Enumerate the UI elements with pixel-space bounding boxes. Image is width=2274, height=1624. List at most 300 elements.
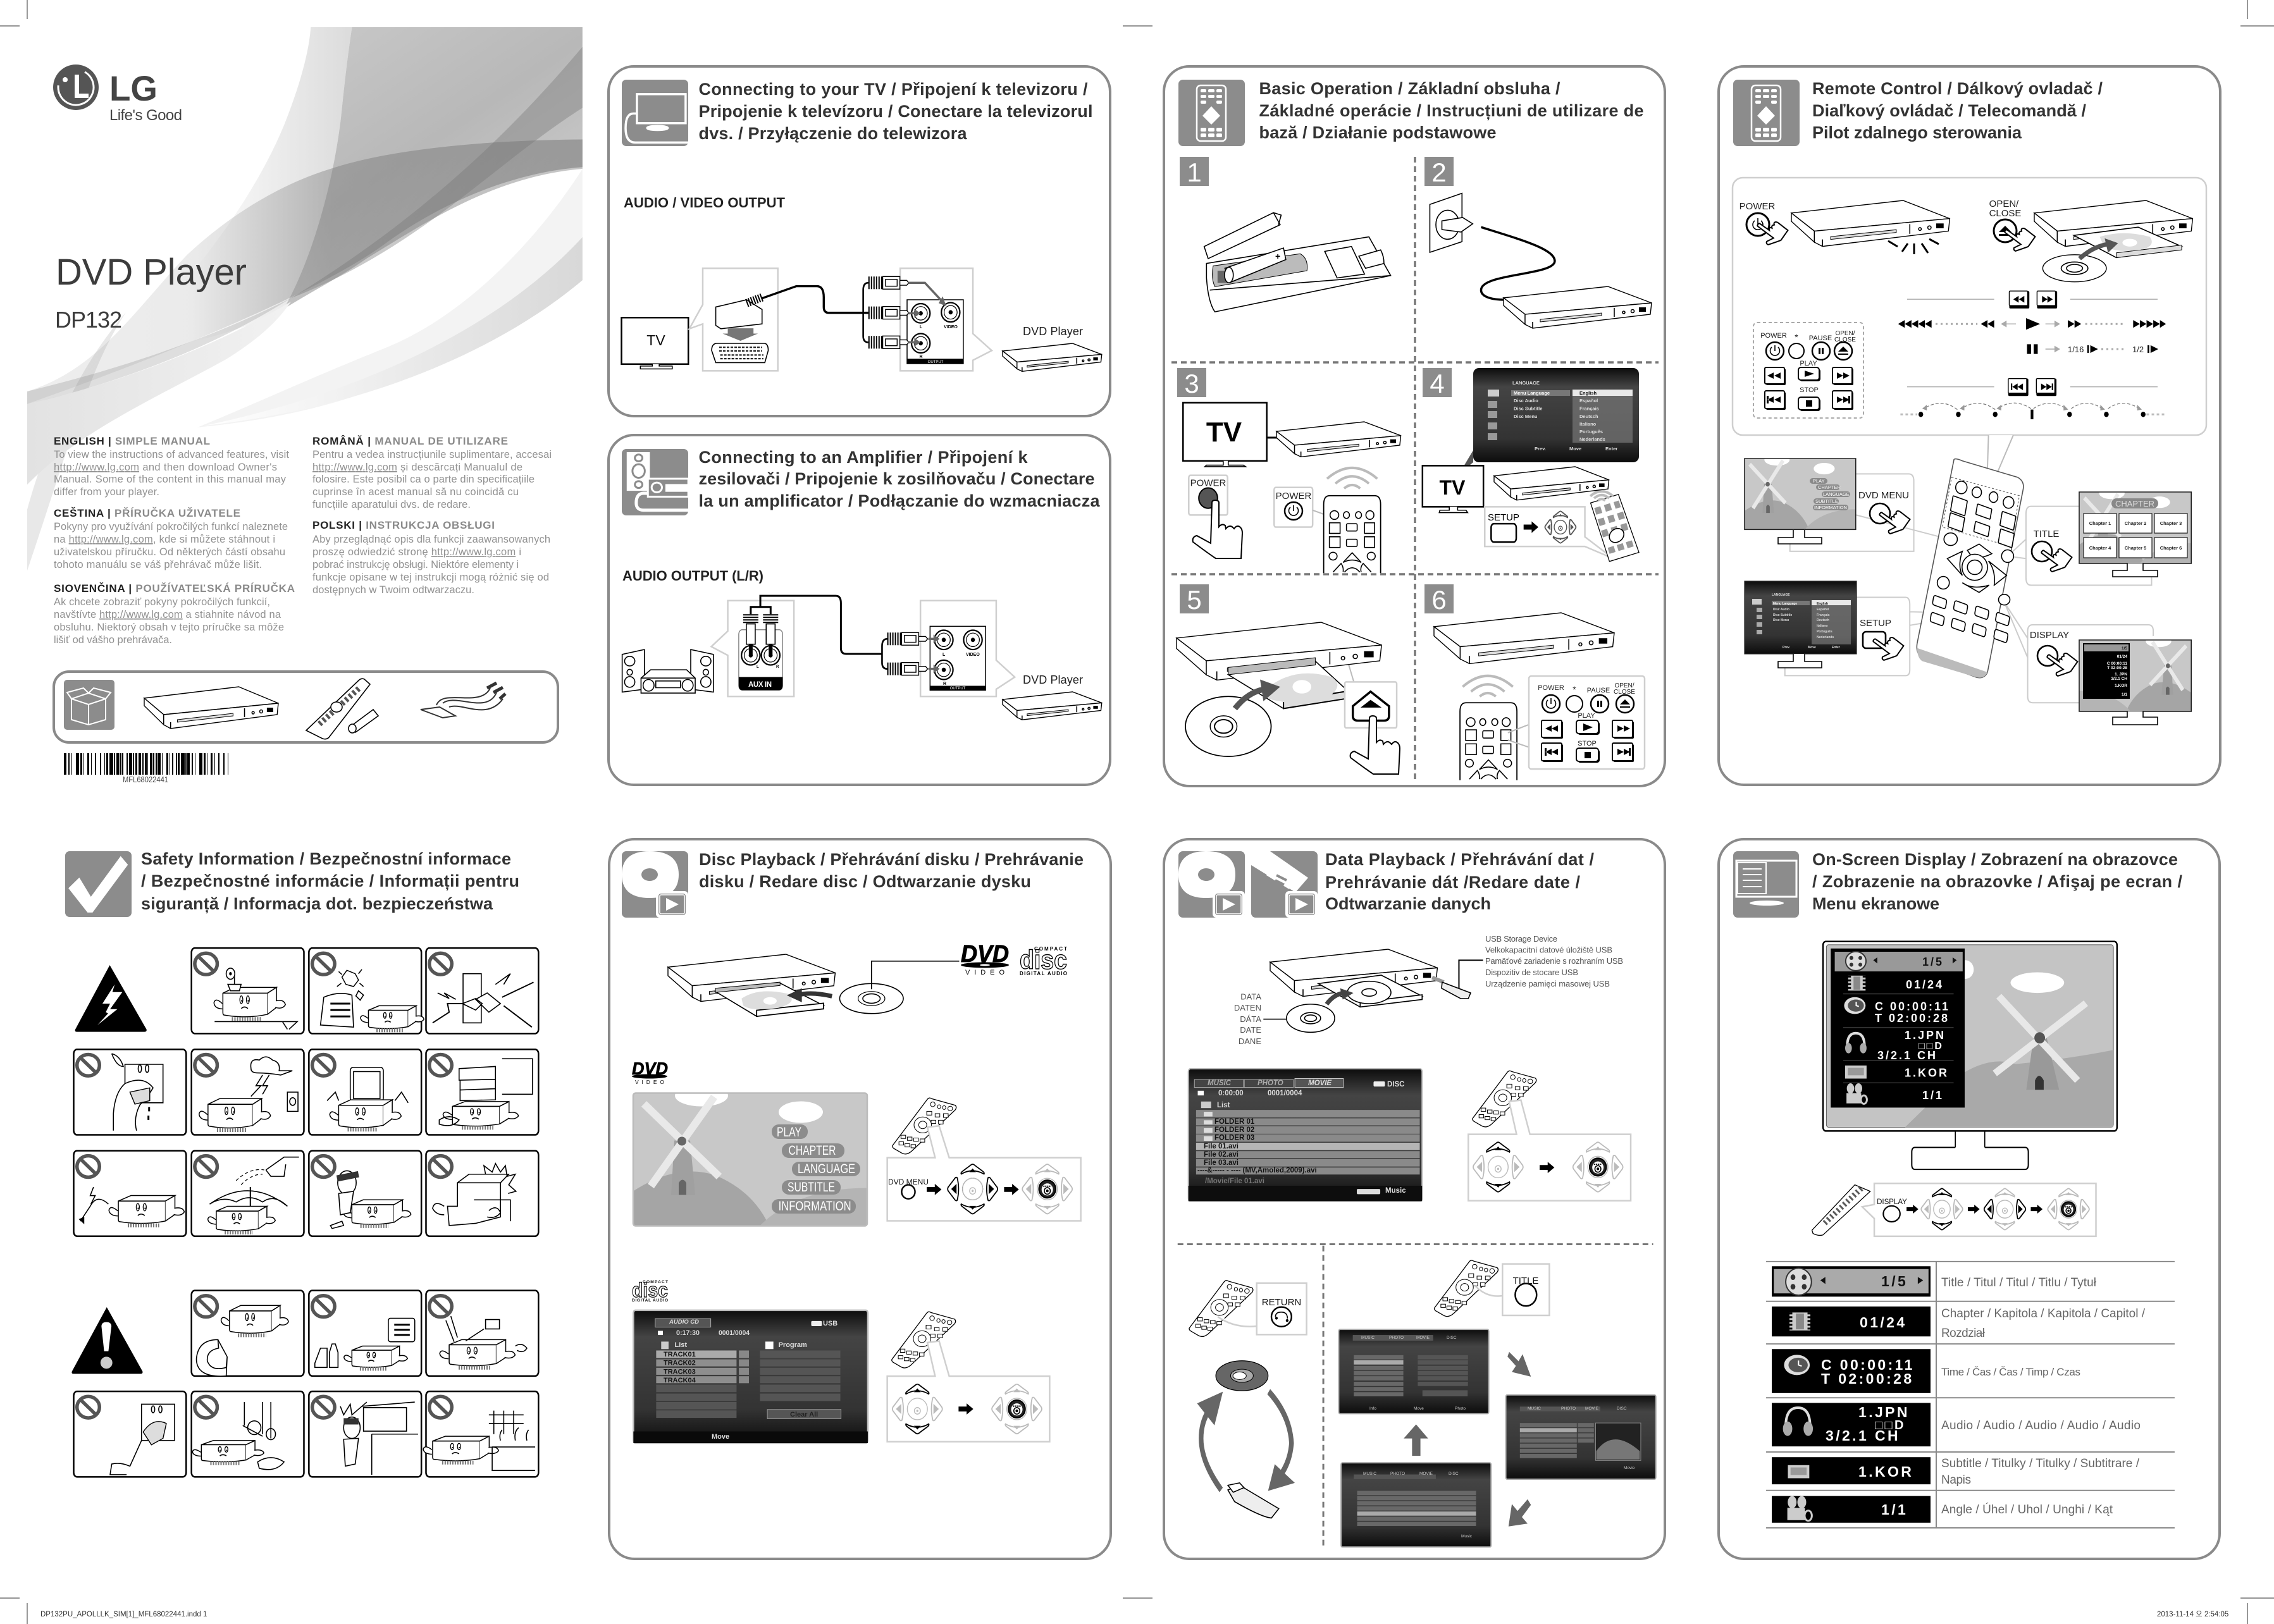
screen: audio cd menu: 0:17:30 — [676, 1329, 700, 1337]
icon: dvd player — [144, 687, 278, 729]
screen: setup menu: Português — [1817, 630, 1832, 634]
cell: electric plug — [426, 948, 538, 1033]
diagram: title switches music photo movie: PHOTO — [1390, 1472, 1405, 1476]
screen: movie file list — [1189, 1069, 1422, 1201]
step 3: power on: 3 — [1184, 369, 1199, 398]
heading: Diaľkový ovládač / Telecomandă / — [1812, 101, 2086, 120]
step 3: power on: POWER — [1190, 478, 1226, 488]
power and open close: OPEN/ — [1989, 199, 2019, 209]
monitor with osd overlay: T 02:00:28 — [1875, 1012, 1950, 1024]
screen: language menu: Deutsch — [1579, 414, 1598, 419]
diagram: title switches music photo movie: PHOTO — [1561, 1406, 1576, 1411]
heading: siguranță / Informacja dot. bezpieczeństwa — [141, 894, 493, 913]
table: osd legend: 1/1 — [1881, 1501, 1908, 1518]
diagram: title switches music photo movie: Move — [1414, 1406, 1424, 1411]
panel: basic operation — [1164, 66, 1665, 786]
screen: chapter menu: Chapter 2 — [2125, 520, 2146, 526]
barcode: MFL68022441 — [123, 775, 168, 784]
table: osd legend: Rozdział — [1941, 1327, 1986, 1340]
cell: heat source — [309, 948, 424, 1033]
table: osd legend: Time / Čas / Čas / Timp / Czas — [1941, 1366, 2080, 1378]
logo: LG Life's Good — [52, 63, 182, 124]
diagram: TV scart to RCA: R — [919, 355, 923, 359]
cell: falling object — [426, 1291, 538, 1376]
screen: dvd menu: SUBTITLE — [788, 1180, 835, 1195]
remote control illustration with callouts — [1745, 435, 2191, 725]
cell: child — [309, 1151, 421, 1236]
screen: movie file list: MUSIC — [1208, 1080, 1232, 1087]
cell: lightning storm — [192, 1049, 304, 1135]
heading: Pilot zdalnego sterowania — [1812, 123, 2022, 142]
screen: audio cd menu: USB — [823, 1320, 837, 1327]
controls: display sequence: DISPLAY — [1877, 1198, 1907, 1206]
heading — [1259, 79, 1643, 142]
text block: Slovak: SIOVENČINA | POUŽÍVATEĽSKÁ PRÍRUČKA — [54, 582, 295, 594]
transport key rows — [1898, 291, 2166, 419]
diagram: TV scart to RCA: DVD Player — [1023, 325, 1083, 338]
icon: cable — [421, 683, 505, 718]
screen: chapter menu: CHAPTER — [2115, 499, 2154, 508]
icon: open box — [64, 680, 114, 730]
diagram: disc and usb: Urządzenie pamięci masowej USB — [1485, 979, 1610, 988]
table: osd legend: 1/5 — [1881, 1273, 1908, 1289]
heading: zesilovači / Pripojenie k zosilňovaču / Conectare — [698, 469, 1094, 488]
table: osd legend: □□D — [1875, 1418, 1906, 1432]
text block: Romanian: Pentru a vedea instrucțiunile suplimentare, accesai — [312, 449, 552, 460]
diagram: return switches disc and usb: RETURN — [1262, 1297, 1301, 1308]
text block: Czech: CEŠTINA | PŘÍRUČKA UŽIVATELE — [54, 507, 240, 519]
heading — [1325, 850, 1594, 913]
diagram: title switches music photo movie — [1338, 1260, 1656, 1547]
keypad: CLOSE — [1614, 689, 1635, 696]
cell: water and umbrella — [192, 1151, 304, 1236]
logo: compact disc small: disc — [632, 1279, 668, 1301]
text block: Romanian — [312, 435, 552, 510]
icon: monitor menu — [1733, 851, 1799, 918]
diagram: title switches music photo movie: DISC — [1617, 1406, 1627, 1411]
diagram: amplifier to RCA: DVD Player — [1023, 674, 1083, 686]
screen: language menu: Français — [1579, 406, 1599, 411]
keypad: * — [1573, 684, 1576, 694]
screen: movie file list: DISC — [1387, 1081, 1404, 1088]
screen: audio cd menu: Clear All — [790, 1411, 818, 1418]
diagram: disc and usb: DÁTA — [1240, 1014, 1261, 1024]
icon: speaker connection — [622, 449, 688, 515]
cell: broken unit — [426, 1151, 538, 1236]
screen C — [1341, 1463, 1491, 1547]
text block: Polish — [312, 519, 550, 596]
heading — [698, 448, 1100, 510]
heading — [699, 850, 1084, 891]
table: osd legend: Title / Titul / Titul / Titlu / Tytuł — [1941, 1276, 2097, 1289]
button labels: SETUP — [1860, 618, 1891, 629]
screen: chapter menu: Chapter 1 — [2089, 520, 2111, 526]
panel: safety information — [65, 849, 538, 1477]
heading: dvs. / Przyłączenie do telewizora — [698, 124, 967, 143]
monitor with osd overlay: 01/24 — [1906, 978, 1944, 991]
step 3: power on: POWER — [1276, 491, 1311, 501]
text block: Polish: pobrać instrukcję obsługi. Niektóre elementy i — [312, 559, 519, 570]
step 4: setup menu — [1423, 368, 1639, 565]
text block: Slovak: navštívte http://www.lg.com a stiahnite návod na — [54, 609, 281, 620]
keypad: STOP — [1800, 386, 1819, 394]
diagram: amplifier to RCA: L — [757, 665, 759, 669]
icon: check mark — [65, 851, 132, 917]
screen: setup menu: Enter — [1832, 646, 1840, 649]
screen: display info: 1.KOR — [2115, 684, 2127, 688]
diagram: title switches music photo movie: MUSIC — [1363, 1472, 1376, 1476]
screen: dvd menu: INFORMATION — [1814, 505, 1847, 510]
screen: movie file list: List — [1217, 1102, 1230, 1109]
step 6: remote buttons — [1424, 584, 1645, 780]
screen A — [1338, 1329, 1489, 1413]
icon: remote and battery — [306, 679, 378, 739]
diagram: disc and usb: DANE — [1239, 1037, 1261, 1046]
screen: dvd menu: PLAY — [1813, 478, 1825, 484]
screen: display info: 1. JPN — [2115, 672, 2127, 677]
screen: dvd menu — [1745, 454, 1856, 544]
screen: movie file list: 0:00:00 — [1218, 1090, 1244, 1097]
cover panel: swirl background — [27, 27, 583, 571]
screen: setup menu: Prev. — [1783, 646, 1790, 649]
table: osd legend: C 00:00:11 — [1821, 1356, 1915, 1373]
box: transport functions: 1/16 — [2068, 345, 2084, 354]
screen: language menu: Italiano — [1579, 421, 1597, 427]
screen: display info: 1/1 — [2122, 692, 2127, 697]
button labels: TITLE — [2034, 529, 2059, 539]
screen: setup menu: Español — [1817, 608, 1829, 612]
screen: language menu — [1459, 368, 1639, 474]
panel: data playback — [1164, 839, 1665, 1559]
heading: bază / Działanie podstawowe — [1259, 123, 1497, 142]
screen: setup menu: Italiano — [1817, 624, 1828, 628]
text block: Romanian: http://www.lg.com și descărcați Manualul de — [312, 462, 522, 473]
screen: dvd menu: SUBTITLE — [1815, 498, 1838, 504]
heading: Základné operácie / Instrucțiuni de utilizare de — [1259, 101, 1643, 120]
diagram: title switches music photo movie: Movie — [1624, 1466, 1635, 1470]
table: osd legend: Subtitle / Titulky / Titulky / Subtitrare / — [1941, 1457, 2140, 1470]
cell: cable damage — [73, 1151, 186, 1236]
screen: language menu: Move — [1569, 446, 1581, 452]
controls: display sequence — [1812, 1183, 2096, 1236]
text block: Romanian: ROMÂNĂ | MANUAL DE UTILIZARE — [312, 435, 508, 447]
table: osd legend: Angle / Úhel / Uhol / Unghi / Kąt — [1941, 1503, 2113, 1516]
heading: Prehrávanie dát /Redare date / — [1325, 873, 1580, 892]
table: osd legend — [1766, 1262, 2175, 1528]
text block: English: Manual. Some of the content in this manual may — [54, 474, 287, 485]
screen: movie file list: /Movie/File 01.avi — [1205, 1178, 1264, 1185]
screen: movie file list: FOLDER 03 — [1214, 1135, 1254, 1142]
panel: accessories — [54, 672, 558, 742]
icon: tv connection — [622, 80, 688, 146]
text block: Polish: Aby przeglądnąć opis dla funkcji zaawansowanych — [312, 534, 550, 545]
diagram: title switches music photo movie: DISC — [1447, 1336, 1457, 1340]
screen: setup menu: Français — [1817, 613, 1830, 617]
cell: kitchen steam — [423, 1391, 538, 1477]
table: osd legend: Audio / Audio / Audio / Audio / Audio — [1941, 1419, 2141, 1432]
diagram: disc and usb: DATA — [1240, 992, 1261, 1002]
controls: dvd menu sequence — [887, 1098, 1081, 1221]
screen: language menu: Disc Audio — [1514, 398, 1538, 403]
screen: setup menu: LANGUAGE — [1772, 593, 1790, 597]
screen: setup menu: Nederlands — [1817, 636, 1834, 639]
step 5: load disc — [1177, 584, 1400, 774]
title: DVD Player DP132: DP132 — [55, 307, 122, 333]
logo: compact disc large: disc — [1020, 945, 1067, 975]
screen: dvd menu: LANGUAGE — [798, 1162, 855, 1176]
diagram: disc and usb: Dispozitiv de stocare USB — [1485, 968, 1578, 977]
diagram: amplifier to RCA: VIDEO — [966, 653, 980, 657]
screen: setup menu — [1745, 581, 1857, 668]
screen: language menu: LANGUAGE — [1512, 380, 1540, 386]
diagram: amplifier to RCA: R — [776, 665, 779, 669]
heading: Odtwarzanie danych — [1325, 894, 1491, 913]
screen: language menu: Español — [1579, 398, 1598, 403]
text block: English: http://www.lg.com and then download Owner's — [54, 462, 277, 473]
screen: language menu: Disc Menu — [1514, 414, 1538, 419]
screen: audio cd menu: TRACK03 — [664, 1369, 696, 1376]
screen: setup menu: Disc Menu — [1773, 618, 1789, 622]
screen: movie file list: File 02.avi — [1204, 1151, 1239, 1159]
screen: audio cd menu: Move — [712, 1433, 729, 1441]
logo: compact disc small: DIGITAL AUDIO — [632, 1298, 668, 1303]
text block: Romanian: cuprinse în acest manual să nu coincidă cu — [312, 486, 519, 498]
step 4: setup menu: SETUP — [1488, 512, 1519, 523]
step 1: insert batteries — [1180, 157, 1391, 312]
screen: chapter menu — [2079, 488, 2191, 577]
screen: audio cd menu: TRACK01 — [664, 1351, 696, 1358]
screen: display info — [2079, 636, 2191, 725]
logo: LG Life's Good: Life's Good — [109, 107, 182, 124]
screen: movie file list: MOVIE — [1308, 1080, 1332, 1087]
table: osd legend: 3/2.1 CH — [1826, 1427, 1900, 1444]
screen: audio cd menu: TRACK04 — [664, 1377, 696, 1384]
monitor with osd overlay: 1/5 — [1922, 956, 1944, 968]
screen: chapter menu: Chapter 6 — [2160, 545, 2182, 551]
text block: Czech: uživatelskou příručku. Od některých částí obsahu — [54, 546, 285, 558]
screen: language menu: Enter — [1605, 446, 1617, 452]
subheading: audio video output: AUDIO / VIDEO OUTPUT — [624, 195, 786, 211]
keypad — [1529, 676, 1645, 769]
diagram: title switches music photo movie: MOVIE — [1585, 1406, 1599, 1411]
heading — [1812, 79, 2103, 142]
step dividers — [1171, 157, 1659, 779]
monitor with osd overlay — [1823, 942, 2117, 1169]
screen: display info: T 02:00:28 — [2107, 666, 2127, 670]
cell: stacked boxes near window — [426, 1049, 538, 1135]
panel: remote control — [1719, 66, 2220, 785]
diagram: TV scart to RCA: TV — [646, 332, 665, 348]
controls: track selection — [887, 1312, 1049, 1442]
screen: audio cd menu: List — [674, 1341, 687, 1349]
screen: language menu: Português — [1579, 429, 1603, 434]
cell: dusty place — [192, 1391, 304, 1477]
icon: electric hazard triangle — [75, 965, 147, 1032]
diagram: title switches music photo movie: PHOTO — [1389, 1336, 1404, 1340]
heading: Menu ekranowe — [1812, 894, 1939, 913]
diagram: title switches music photo movie: TITLE — [1513, 1276, 1538, 1286]
heading: Pripojenie k televízoru / Conectare la televizorul — [698, 102, 1093, 121]
cell: flowers on player — [192, 948, 304, 1033]
diagram: amplifier to RCA: OUTPUT — [950, 687, 966, 691]
keypad — [1753, 323, 1863, 418]
heading: Remote Control / Dálkový ovladač / — [1812, 79, 2103, 98]
screen: dvd menu — [633, 1085, 867, 1226]
diagram: TV scart to RCA: L — [920, 325, 923, 329]
text block: Slovak: lišiť od vášho prehrávača. — [54, 634, 172, 646]
panel: disc playback — [609, 839, 1111, 1559]
icon: caution triangle — [71, 1307, 142, 1374]
step 1: insert batteries: + — [1275, 251, 1280, 261]
screen: dvd menu: LANGUAGE — [1823, 491, 1850, 497]
screen: display info: 1/5 — [2122, 646, 2127, 651]
keypad: PLAY — [1578, 712, 1595, 720]
screen: setup menu: Move — [1808, 646, 1816, 649]
heading: / Zobrazenie na obrazovke / Afişaj pe ecran / — [1812, 872, 2182, 891]
cell: child head bump — [309, 1391, 421, 1477]
heading: Data Playback / Přehrávání dat / — [1325, 850, 1594, 869]
diagram: title switches music photo movie: MOVIE — [1419, 1472, 1433, 1476]
keypad: OPEN/ — [1835, 330, 1855, 337]
step 3: power on: TV — [1206, 417, 1242, 448]
screen: language menu: Menu Language — [1514, 390, 1550, 396]
logo: DVD video large: VIDEO — [965, 969, 1004, 976]
table: osd legend: Napis — [1941, 1473, 1971, 1487]
caution cells — [71, 1291, 538, 1477]
monitor with osd overlay: □□D — [1919, 1041, 1944, 1052]
keypad: PAUSE — [1587, 687, 1610, 694]
diagram: TV scart to RCA: OUTPUT — [928, 360, 944, 364]
screen: chapter menu: Chapter 4 — [2089, 545, 2111, 551]
heading: On-Screen Display / Zobrazení na obrazovce — [1812, 850, 2178, 869]
heading: Connecting to your TV / Připojení k televizoru / — [698, 80, 1088, 99]
controls: dvd menu sequence: DVD MENU — [888, 1178, 929, 1186]
diagram: title switches music photo movie: Photo — [1455, 1406, 1466, 1411]
screen: display info: 3/2.1 CH — [2111, 677, 2127, 681]
diagram: title switches music photo movie: Info — [1369, 1406, 1376, 1411]
text block: Czech — [54, 507, 288, 570]
heading: disku / Redare disc / Odtwarzanie dysku — [699, 872, 1031, 891]
diagram: title switches music photo movie: MUSIC — [1361, 1336, 1375, 1340]
table: osd legend: 1.KOR — [1858, 1463, 1913, 1480]
screen: chapter menu: Chapter 3 — [2160, 520, 2182, 526]
heading: / Bezpečnostné informácie / Informații pentru — [141, 871, 519, 890]
icon: usb play — [1251, 851, 1318, 918]
diagram: disc and usb: Pamäťové zariadenie s rozhraním USB — [1485, 956, 1623, 966]
screen: language menu: Prev. — [1535, 446, 1546, 452]
crop marks and print slug: 2013-11-14 오 2:54:05 — [2157, 1611, 2228, 1618]
screen: audio cd menu: 0001/0004 — [719, 1329, 750, 1337]
screen: movie file list: File 03.avi — [1204, 1159, 1239, 1167]
step 4: setup menu: TV — [1440, 476, 1466, 499]
diagram: return switches disc and usb — [1189, 1281, 1307, 1518]
keypad: * — [1795, 332, 1798, 342]
keypad: POWER — [1538, 684, 1564, 692]
table: osd legend: 1.JPN — [1858, 1404, 1910, 1420]
keypad: PLAY — [1800, 360, 1817, 367]
power and open close: CLOSE — [1989, 208, 2021, 219]
table: osd legend: 01/24 — [1860, 1314, 1907, 1331]
subheading: audio output: AUDIO OUTPUT (L/R) — [622, 568, 763, 584]
screen: dvd menu: CHAPTER — [1818, 484, 1841, 490]
screen B — [1506, 1395, 1656, 1479]
text block: Czech: tohoto manuálu se váš přehrávač může lišit. — [54, 559, 262, 570]
text block: Slovak: Ak chcete zobraziť pokyny pokročilých funkcií, — [54, 596, 270, 608]
text block: Slovak: obsluhu. Niektorý obsah v tejto príručke sa môže — [54, 622, 284, 633]
icon: disc play — [1178, 851, 1245, 918]
text block: Czech: na http://www.lg.com, kde si můžete stáhnout i — [54, 534, 275, 545]
diagram: title switches music photo movie: DISC — [1449, 1472, 1459, 1476]
text block: English: To view the instructions of advanced features, visit — [54, 449, 289, 460]
button labels: DISPLAY — [2030, 630, 2069, 641]
logo: LG Life's Good: LG — [109, 68, 158, 108]
heading — [141, 849, 519, 913]
box: transport functions: 1/2 — [2132, 345, 2144, 354]
diagram: title switches music photo movie: MOVIE — [1416, 1336, 1430, 1340]
screen: audio cd menu: AUDIO CD — [669, 1319, 699, 1326]
heading: Disc Playback / Přehrávání disku / Prehrávanie — [699, 850, 1084, 869]
panel: connecting to TV — [609, 66, 1110, 416]
text block: Polish: POLSKI | INSTRUKCJA OBSŁUGI — [312, 519, 495, 531]
step 4: setup menu: 4 — [1430, 369, 1445, 398]
screen: dvd menu: PLAY — [777, 1125, 801, 1140]
screen: setup menu: Deutsch — [1817, 618, 1829, 622]
screen: movie file list: File 01.avi — [1204, 1143, 1239, 1150]
step 2: plug in power: 2 — [1431, 157, 1447, 187]
screen: setup menu: Disc Subtitle — [1773, 613, 1793, 617]
step 2: plug in power — [1424, 157, 1652, 328]
keypad: PAUSE — [1809, 335, 1832, 342]
step 5: load disc: 5 — [1187, 585, 1202, 615]
logo: compact disc small: COMPACT — [643, 1280, 668, 1284]
diagram: disc and usb: USB Storage Device — [1485, 934, 1557, 944]
text block: Slovak — [54, 582, 295, 646]
text block: Romanian: funcțiile aparatului dvs. de redare. — [312, 499, 471, 510]
heading: Basic Operation / Základní obsluha / — [1259, 79, 1560, 98]
diagram: TV scart to RCA — [622, 268, 1102, 371]
diagram: amplifier to RCA: AUX IN — [748, 681, 772, 689]
screen: movie file list: FOLDER 01 — [1214, 1118, 1255, 1126]
text block: Polish: dostępnych w Twoim odtwarzaczu. — [312, 584, 474, 596]
text block: Czech: Pokyny pro využívání pokročilých funkcí naleznete — [54, 521, 288, 532]
diagram: disc and usb — [1234, 934, 1623, 1046]
step 6: remote buttons: 6 — [1431, 585, 1447, 615]
text block: English: differ from your player. — [54, 486, 159, 498]
power and open close — [1739, 199, 2192, 282]
diagram: disc and usb: DATE — [1240, 1025, 1261, 1035]
diagram: disc and usb: Velkokapacitní datové úložiště USB — [1485, 945, 1612, 955]
screen: audio cd menu — [633, 1310, 868, 1443]
monitor with osd overlay: 1/1 — [1922, 1089, 1944, 1102]
keypad: OPEN/ — [1614, 682, 1634, 689]
table: osd legend: T 02:00:28 — [1821, 1370, 1914, 1387]
screen: language menu: English — [1579, 390, 1597, 396]
diagram: load disc — [668, 954, 959, 1016]
screen: audio cd menu: Program — [779, 1341, 807, 1349]
screen: movie file list: PHOTO — [1257, 1080, 1283, 1087]
screen: display info: C 00:00:11 — [2107, 661, 2127, 666]
logo: DVD video small: DVD — [632, 1059, 668, 1078]
text block: Polish: funkcje opisane w tej instrukcji mogą różnić się od — [312, 572, 549, 583]
cell: chemicals — [309, 1291, 421, 1376]
keypad: STOP — [1578, 740, 1597, 747]
screen: movie file list: ----&----- - ---- (MV,Amoled,2009).avi — [1197, 1167, 1317, 1174]
box: transport functions — [1733, 178, 2206, 435]
cell: magnet — [192, 1291, 304, 1376]
screen: display info: 01/24 — [2117, 655, 2127, 659]
screen: dvd menu: INFORMATION — [779, 1199, 851, 1214]
step 3: power on — [1177, 368, 1401, 573]
